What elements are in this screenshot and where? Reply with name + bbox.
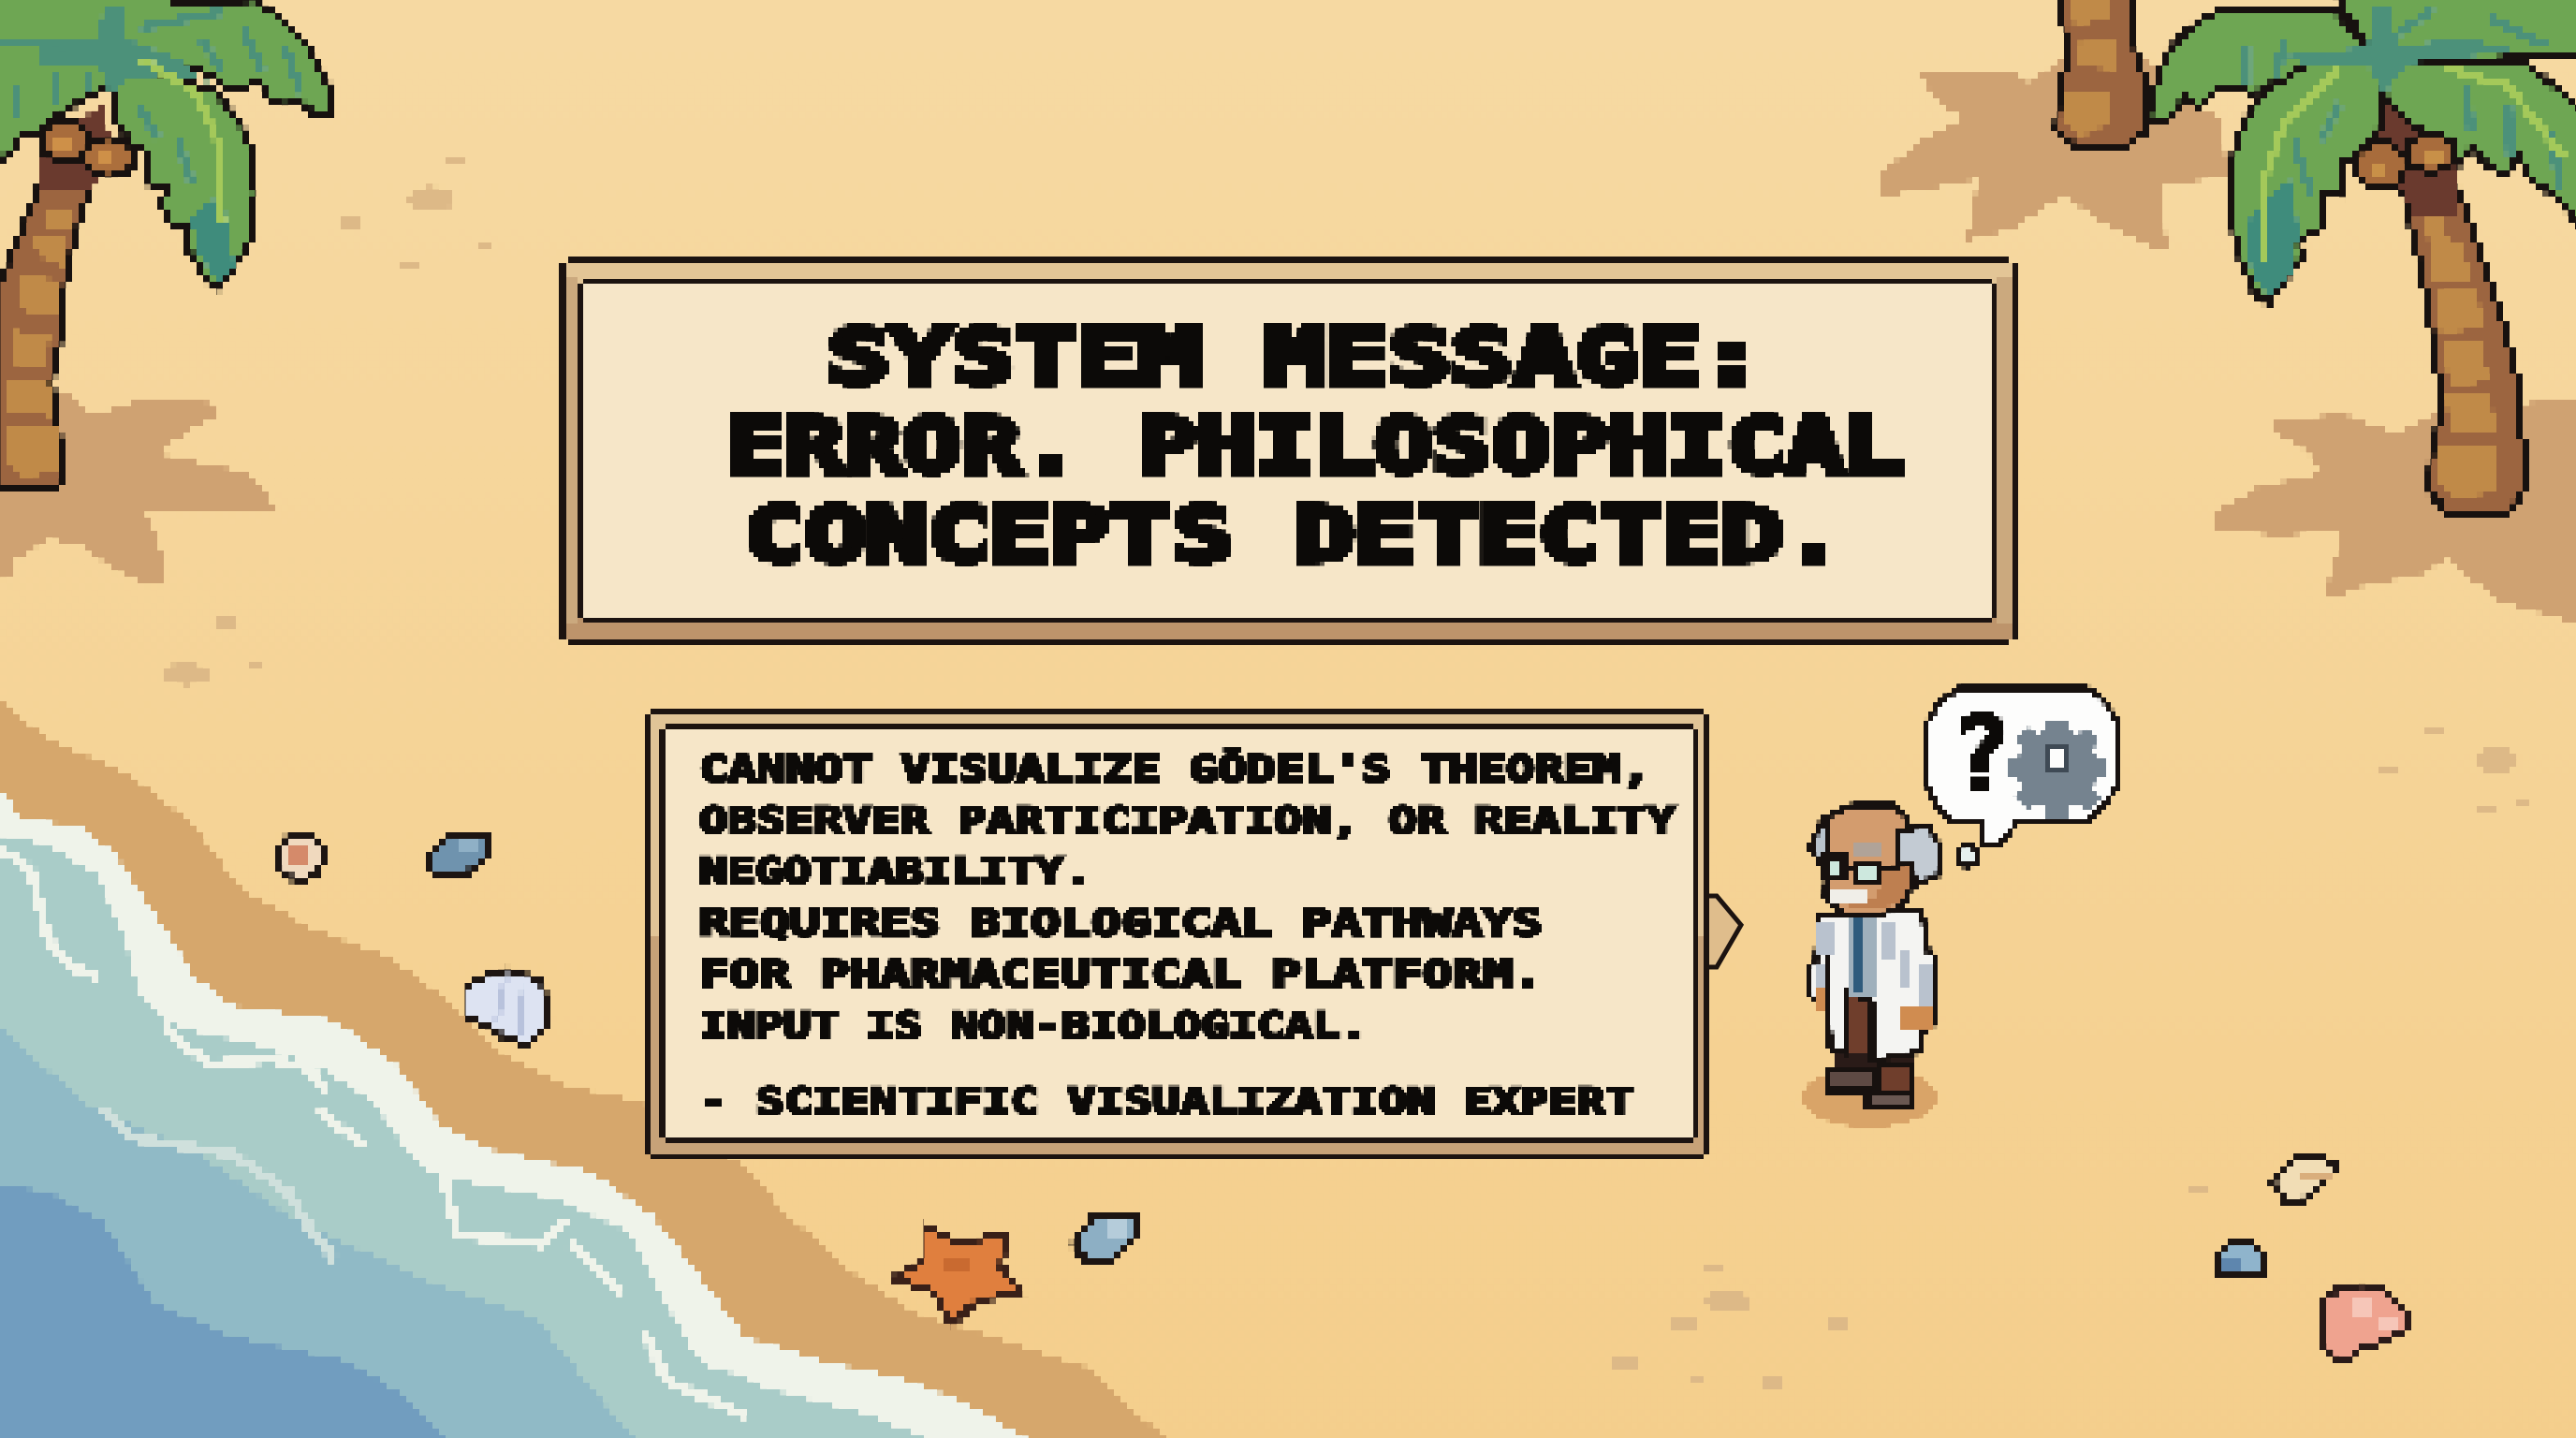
rock: blue bottom <box>1073 1214 1134 1260</box>
face shade <box>1849 866 1910 910</box>
quote text: - SCIENTIFIC VISUALIZATION EXPERT <box>699 1081 1633 1123</box>
moustache <box>1830 889 1869 905</box>
rock: blue right <box>2219 1242 2261 1274</box>
scientist <box>1802 805 1940 1127</box>
lab coat <box>1809 911 1936 1061</box>
left palm tree <box>0 0 332 491</box>
quote inner border <box>659 724 1698 1143</box>
title text: SYSTEM MESSAGE: <box>827 314 1763 401</box>
quote frame top <box>651 714 1704 936</box>
rock: blue left <box>429 835 490 873</box>
panel paper <box>583 284 1992 618</box>
brow <box>1855 844 1881 856</box>
right frond shading <box>2247 178 2298 298</box>
shell: big white <box>465 969 548 1045</box>
mid water <box>0 1028 646 1438</box>
right coconuts <box>2355 134 2456 189</box>
panel outer border <box>559 257 2018 645</box>
question mark: ? <box>1952 695 2012 816</box>
head <box>1825 805 1912 915</box>
back trunk patches <box>2061 0 2116 138</box>
gear icon <box>2007 719 2108 818</box>
down frond <box>112 61 256 288</box>
coat inner line <box>1825 955 1830 1049</box>
shirt <box>1847 917 1875 995</box>
bubble dot <box>1957 845 1978 866</box>
right palm tree <box>2148 0 2576 514</box>
shallow water <box>0 835 955 1438</box>
upper right frond <box>112 0 332 114</box>
left frond <box>0 47 115 167</box>
shell: small pink <box>278 833 323 880</box>
quote frame bottom <box>651 936 1704 1154</box>
quote text: INPUT IS NON-BIOLOGICAL. <box>699 1005 1368 1048</box>
back palm shadow <box>1879 57 2227 252</box>
upper left frond <box>2148 8 2374 122</box>
trousers <box>1846 992 1888 1072</box>
panel frame bottom <box>566 441 2012 639</box>
left shoe <box>1827 1070 1876 1091</box>
frond veins <box>0 11 301 183</box>
top frond <box>0 0 178 61</box>
right palm trunk <box>2402 183 2526 514</box>
frond shading <box>192 192 234 283</box>
right trunk top dark <box>2354 95 2460 213</box>
quote text: CANNOT VISUALIZE GÖDEL'S THEOREM, <box>699 747 1650 791</box>
title text: CONCEPTS DETECTED. <box>744 492 1844 579</box>
right frond veins <box>2247 9 2560 197</box>
tie <box>1853 919 1865 992</box>
dark hem <box>1837 1053 1916 1072</box>
right palm shadow <box>2213 398 2576 621</box>
deep water <box>0 1186 453 1438</box>
left palm trunk <box>0 183 91 491</box>
thought bubble <box>1927 688 2117 866</box>
quote panel <box>645 709 1741 1159</box>
title text: ERROR. PHILOSOPHICAL <box>726 403 1903 490</box>
sand specks <box>164 157 2531 1387</box>
hands <box>1814 990 1931 1030</box>
shell: pink right <box>2321 1284 2408 1362</box>
left palm shadow <box>0 393 273 584</box>
trunk light patches <box>7 208 75 477</box>
right hair <box>1897 827 1940 885</box>
quote paper <box>666 729 1693 1137</box>
speech pointer <box>1705 896 1741 967</box>
starfish <box>893 1225 1020 1325</box>
right shoe <box>1867 1065 1912 1108</box>
right top fronds <box>2333 0 2576 67</box>
quote outer border <box>645 709 1709 1159</box>
right crown <box>2284 9 2518 94</box>
panel side frame <box>566 277 2012 624</box>
title text <box>726 314 1903 579</box>
shell: tan right <box>2273 1155 2338 1200</box>
wet sand band <box>0 701 1175 1438</box>
right trunk patches <box>2424 219 2496 499</box>
ground shadow <box>1802 1067 1937 1127</box>
back palm trunk <box>2056 0 2146 148</box>
bubble body <box>1927 688 2117 846</box>
right frond <box>2383 62 2576 236</box>
down left frond <box>2229 61 2383 304</box>
panel inner border <box>578 279 1997 623</box>
coat shading <box>1814 922 1932 1020</box>
quote text: OBSERVER PARTICIPATION, OR REALITY <box>699 800 1676 843</box>
crown <box>37 9 208 94</box>
foam streaks <box>0 849 761 1416</box>
coconuts <box>40 120 135 177</box>
quote text: FOR PHARMACEUTICAL PLATFORM. <box>699 954 1543 996</box>
panel frame top <box>566 263 2012 441</box>
left hair <box>1810 824 1839 863</box>
title panel <box>559 257 2018 645</box>
trunk top dark <box>37 103 117 192</box>
sea foam <box>0 788 1039 1438</box>
quote text: NEGOTIABILITY. <box>699 851 1091 893</box>
quote text: REQUIRES BIOLOGICAL PATHWAYS <box>699 902 1543 945</box>
glasses <box>1825 857 1910 882</box>
quote text <box>699 747 1676 1123</box>
